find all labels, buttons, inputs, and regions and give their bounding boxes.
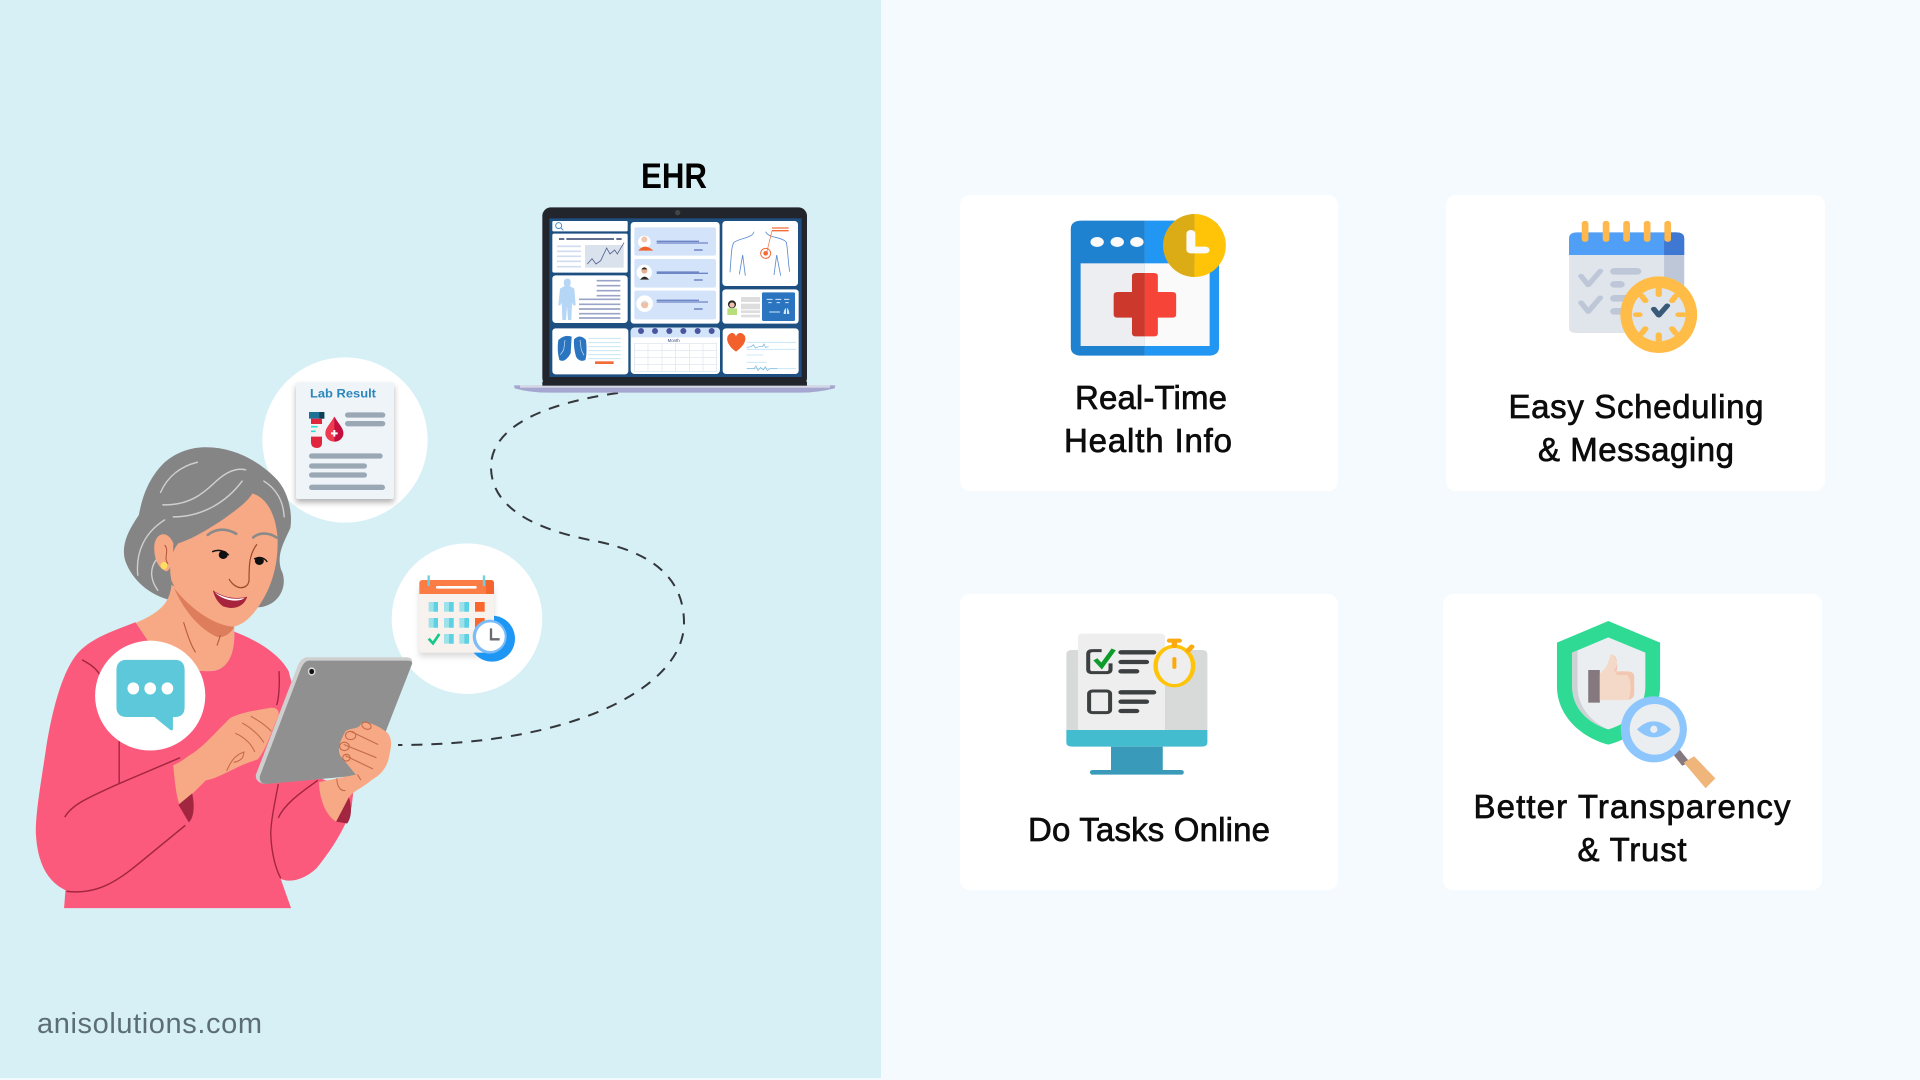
icon: calendar with clock [1569, 223, 1697, 353]
calendar panel [631, 328, 720, 371]
label: Real-Time [1075, 379, 1227, 416]
circle: lab result document [262, 357, 428, 523]
right hand [319, 723, 391, 822]
label: & Messaging [1538, 431, 1734, 468]
dashboard panels [552, 221, 799, 374]
label: Do Tasks Online [1028, 811, 1270, 848]
text: Lab Result: Lab Result [310, 386, 376, 400]
website credit: anisolutions.com [37, 1008, 262, 1040]
label: Easy Scheduling [1508, 388, 1764, 425]
label: Health Info [1064, 422, 1232, 459]
card: real-time health info [960, 195, 1338, 491]
left hand [173, 708, 279, 806]
icon: browser with medical cross and clock [1071, 214, 1226, 356]
neck shadow [174, 588, 234, 637]
dashed connector from tablet to laptop [398, 393, 684, 745]
neck creases [184, 622, 220, 652]
document lines [312, 415, 383, 487]
card: better transparency and trust [1443, 594, 1822, 890]
circle: message bubble [95, 641, 205, 751]
sweater [36, 622, 353, 908]
woman using a tablet [36, 447, 412, 908]
hair back [124, 447, 291, 607]
card: do tasks online [960, 594, 1338, 890]
label: Better Transparency [1474, 788, 1791, 825]
circle: calendar with clock [392, 543, 542, 694]
heading: EHR: EHR [641, 157, 707, 196]
mouth [213, 590, 247, 608]
sweater fold lines [65, 660, 318, 892]
icon: test tube [309, 412, 324, 448]
laptop with EHR dashboard [514, 207, 835, 393]
face [170, 494, 278, 627]
hair strands [137, 462, 284, 590]
icon: monitor with checklist and stopwatch [1066, 634, 1207, 775]
calendar panel: Month [668, 338, 680, 343]
icon: blood drop [325, 417, 343, 442]
ear [154, 534, 173, 571]
icon: shield with thumbs up and magnifier [1557, 621, 1715, 787]
card: easy scheduling and messaging [1446, 195, 1825, 491]
laptop base [514, 385, 835, 393]
panel: left illustration background [0, 0, 881, 1078]
eyes and brows [208, 530, 277, 588]
patient rows [634, 227, 716, 319]
neck [135, 585, 234, 671]
tablet [256, 657, 412, 784]
label: & Trust [1578, 831, 1686, 868]
